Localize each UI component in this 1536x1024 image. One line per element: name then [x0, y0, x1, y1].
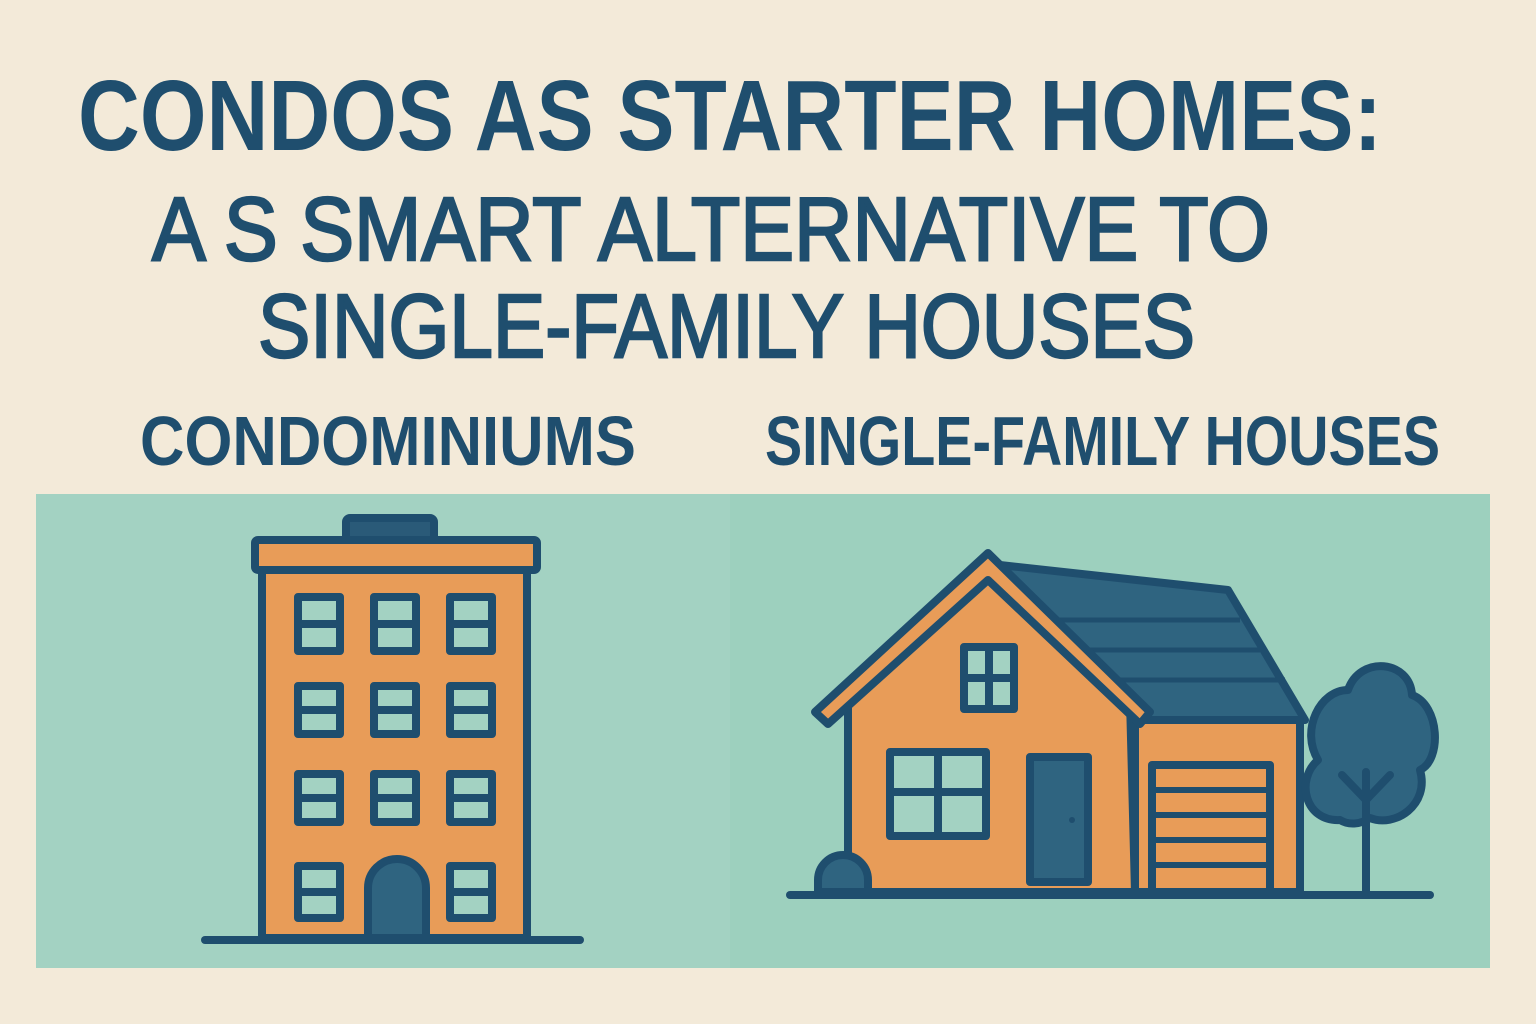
title — [78, 60, 1382, 377]
heading: condominiums: CONDOMINIUMS — [140, 402, 636, 480]
title: A S SMART ALTERNATIVE TO — [152, 180, 1270, 280]
panel: condominiums — [36, 494, 730, 968]
title: SINGLE-FAMILY HOUSES — [258, 277, 1195, 377]
icon: condo building — [205, 518, 580, 940]
panel: single-family houses — [730, 494, 1490, 968]
icon: single-family house — [790, 553, 1435, 895]
